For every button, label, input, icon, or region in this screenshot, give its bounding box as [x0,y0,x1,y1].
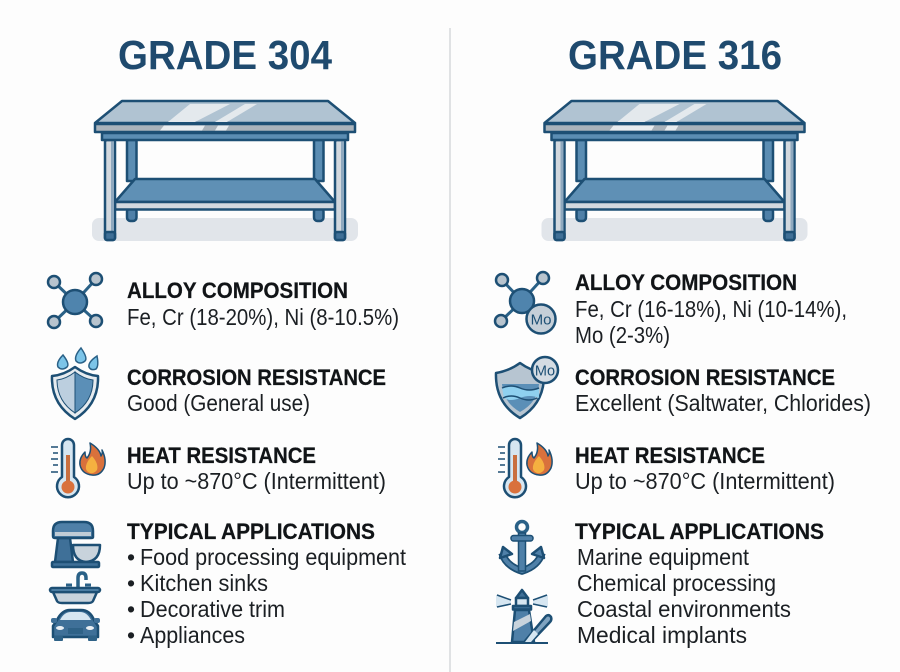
icon: shield with water drops [52,348,98,419]
text: heat resistance [127,443,386,494]
text: typical applications: Marine equipment [577,544,750,570]
text: typical applications: Decorative trim [140,596,285,622]
icon: anchor [500,522,544,571]
icon: shield with waves and Mo [496,357,558,418]
text: typical applications: TYPICAL APPLICATIONS [575,519,824,544]
text: typical applications: Chemical processing [577,570,776,596]
icon: thermometer and flame [498,439,552,497]
text: alloy composition [575,270,847,348]
text: typical applications: Kitchen sinks [140,570,268,596]
text: typical applications: TYPICAL APPLICATIONS [127,519,375,544]
text: alloy composition: Fe, Cr (16-18%), Ni (10-14%), [575,296,847,322]
icon: thermometer and flame [51,439,105,497]
text: typical applications: • [127,596,135,622]
text: alloy composition: ALLOY COMPOSITION [575,270,797,295]
icon: molecule with Mo [495,272,556,334]
text: corrosion resistance [127,365,386,416]
text: typical applications: Food processing equipment [140,544,407,570]
text: typical applications [127,519,407,648]
panel: grade 304 [48,32,407,648]
text: heat resistance: HEAT RESISTANCE [575,443,765,468]
text: corrosion resistance: Excellent (Saltwater, Chlorides) [575,390,871,416]
icon: stand mixer [52,522,100,567]
icon: sink [50,573,100,603]
text: alloy composition: Mo (2-3%) [575,322,670,348]
text: alloy composition [127,278,399,330]
icon: car [51,610,100,641]
title: grade 316: GRADE 316 [568,32,782,78]
text: corrosion resistance: CORROSION RESISTANCE [575,365,835,390]
icon: molecule with Mo: Mo [531,312,551,328]
text: typical applications: Appliances [140,622,245,648]
illustration: steel table 304 [92,101,358,241]
text: corrosion resistance: Good (General use) [127,390,310,416]
text: typical applications: Coastal environments [577,596,791,622]
text: heat resistance: HEAT RESISTANCE [127,443,316,468]
icon: shield with waves and Mo: Mo [535,364,555,380]
panel: grade 316 [495,32,871,648]
text: heat resistance: Up to ~870°C (Intermittent) [127,468,386,494]
text: heat resistance: Up to ~870°C (Intermittent) [575,468,835,494]
text: alloy composition: Fe, Cr (18-20%), Ni (8-10.5%) [127,304,399,330]
icon: molecule [48,273,102,328]
text: typical applications: Medical implants [577,622,747,648]
text: typical applications [575,519,824,648]
text: heat resistance [575,443,835,494]
text: corrosion resistance: CORROSION RESISTANCE [127,365,386,390]
text: typical applications: • [127,622,135,648]
text: typical applications: • [127,570,135,596]
text: corrosion resistance [575,365,871,416]
icon: lighthouse and implant [496,590,551,643]
text: typical applications: • [127,544,135,570]
text: alloy composition: ALLOY COMPOSITION [127,278,348,303]
illustration: steel table 316 [542,101,808,241]
title: grade 304: GRADE 304 [118,32,332,78]
